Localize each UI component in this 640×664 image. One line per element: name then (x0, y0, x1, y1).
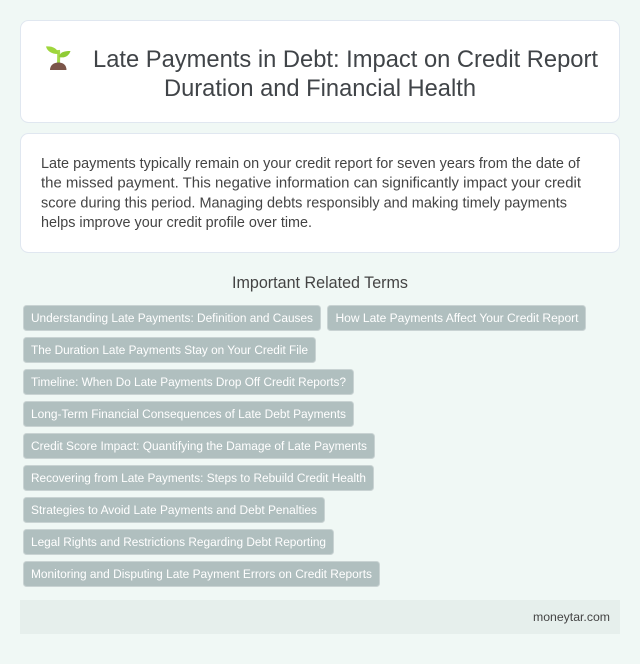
text block: summary: score during this period. Managing debts responsibly and making timely payments (41, 196, 567, 212)
chip: monitoring: Monitoring and Disputing Late Payment Errors on Credit Reports (31, 567, 372, 581)
chip: long-term consequences (24, 402, 354, 426)
text block: summary: the missed payment. This negative information can significantly impact your credit (41, 176, 581, 192)
chip: understanding late payments: Understanding Late Payments: Definition and Causes (31, 311, 313, 325)
chip: legal rights: Legal Rights and Restrictions Regarding Debt Reporting (31, 535, 326, 549)
chip: recovering: Recovering from Late Payments: Steps to Rebuild Credit Health (31, 471, 366, 485)
chip: strategies: Strategies to Avoid Late Payments and Debt Penalties (31, 503, 317, 517)
chip: strategies (24, 498, 324, 522)
heading: related terms: Important Related Terms (232, 274, 408, 292)
chip: duration: The Duration Late Payments Stay on Your Credit File (31, 343, 308, 357)
footer source text: moneytar.com (533, 610, 610, 624)
title (93, 46, 598, 102)
text block: summary (41, 156, 581, 231)
chip: timeline (24, 370, 354, 394)
chip: understanding late payments (24, 306, 320, 330)
chip: recovering (24, 466, 374, 490)
title: Late Payments in Debt: Impact on Credit Report (93, 46, 598, 73)
chip: how late payments affect: How Late Payments Affect Your Credit Report (336, 311, 579, 325)
chip: credit score impact (24, 434, 374, 458)
chip: credit score impact: Credit Score Impact: Quantifying the Damage of Late Payments (31, 439, 367, 453)
panel: related terms chips (24, 306, 586, 586)
panel: summary paragraph (20, 134, 620, 252)
chip: how late payments affect (328, 306, 586, 330)
chip: legal rights (24, 530, 334, 554)
chip: duration (24, 338, 316, 362)
footer (20, 600, 620, 634)
title: Duration and Financial Health (164, 75, 476, 102)
chip: timeline: Timeline: When Do Late Payments Drop Off Credit Reports? (31, 375, 346, 389)
chip: long-term consequences: Long-Term Financial Consequences of Late Debt Payments (31, 407, 346, 421)
text block: summary: helps improve your credit profile over time. (41, 215, 312, 231)
panel: title card (20, 20, 620, 122)
icon: seedling (46, 46, 70, 70)
text block: summary: Late payments typically remain on your credit report for seven years from the date of (41, 156, 581, 172)
chip: monitoring (24, 562, 380, 586)
